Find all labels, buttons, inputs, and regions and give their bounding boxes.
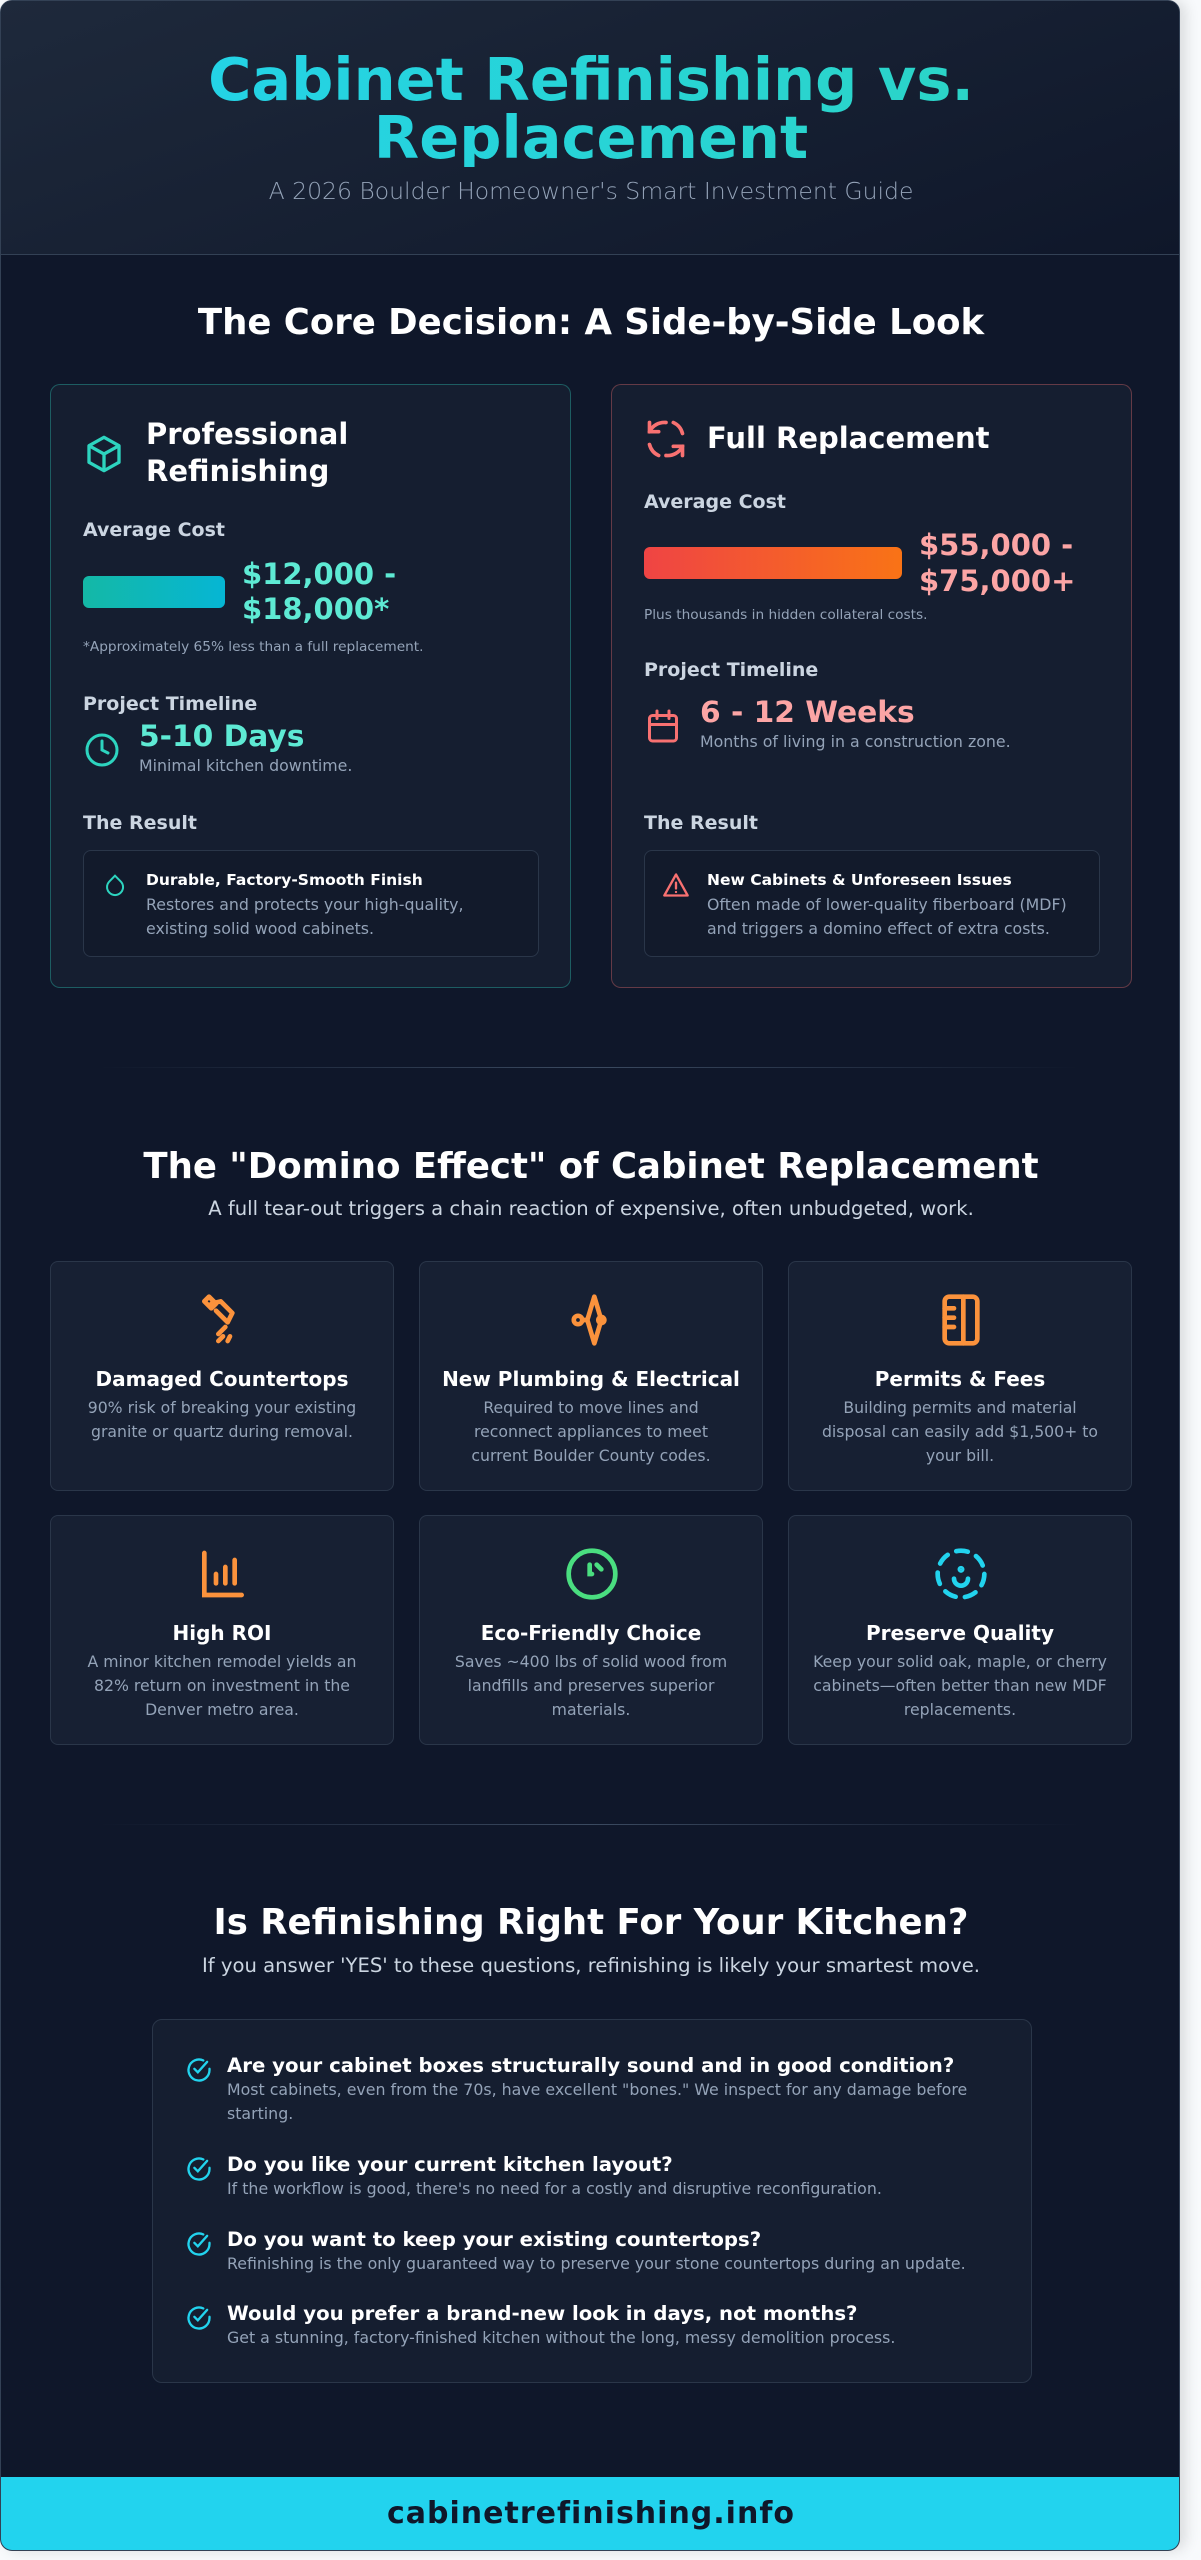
icon: cube <box>87 436 121 472</box>
label: result: The Result <box>83 812 197 834</box>
heading: core decision: The Core Decision: A Side-by-Side Look <box>198 302 984 343</box>
subtitle: checklist: If you answer 'YES' to these questions, refinishing is likely your smartest move. <box>202 1954 980 1977</box>
item 4: Would you prefer a brand-new look in days, not months? <box>227 2302 857 2325</box>
panel: quality: Keep your solid oak, maple, or cherry cabinets—often better than new MDF replacements. <box>813 1652 1107 1719</box>
title <box>1 51 1181 167</box>
heading: domino effect: The "Domino Effect" of Cabinet Replacement <box>143 1146 1039 1187</box>
label: result: The Result <box>644 812 758 834</box>
footnote: *Approximately 65% less than a full replacement. <box>83 639 424 655</box>
label: timeline: Project Timeline <box>83 693 257 715</box>
price: $18,000* <box>242 592 389 626</box>
item 3 <box>187 2228 966 2273</box>
result box: New Cabinets & Unforeseen Issues <box>707 871 1012 889</box>
panel: plumbing: New Plumbing & Electrical <box>442 1367 740 1391</box>
item 4 <box>187 2302 895 2347</box>
result box <box>644 850 1100 957</box>
footnote: Plus thousands in hidden collateral costs. <box>644 607 928 623</box>
icon: warning <box>663 873 689 897</box>
icon: refresh corners <box>648 420 684 458</box>
panel: quality: Preserve Quality <box>866 1621 1054 1645</box>
panel: damaged countertops: 90% risk of breaking your existing granite or quartz during removal. <box>88 1398 356 1441</box>
card title: Full Replacement <box>707 421 990 455</box>
icon: document <box>942 1294 980 1346</box>
icon: plug <box>572 1294 607 1346</box>
price <box>242 557 396 626</box>
price <box>919 528 1075 598</box>
panel: permits <box>788 1261 1132 1491</box>
cost bar <box>83 576 225 608</box>
price: $12,000 - <box>242 557 396 591</box>
timeline subtext: Minimal kitchen downtime. <box>139 756 352 775</box>
item 3: Refinishing is the only guaranteed way to preserve your stone countertops during an update. <box>227 2254 966 2273</box>
label: timeline: Project Timeline <box>644 659 818 681</box>
panel: checklist <box>152 2019 1032 2383</box>
result box: Restores and protects your high-quality, existing solid wood cabinets. <box>146 895 464 938</box>
price: $75,000+ <box>919 564 1075 598</box>
panel: permits: Building permits and material disposal can easily add $1,500+ to your bill. <box>822 1398 1098 1465</box>
panel: permits: Permits & Fees <box>875 1367 1045 1391</box>
panel: professional refinishing <box>50 384 571 988</box>
label: average cost: Average Cost <box>83 519 225 541</box>
icon: calendar <box>648 710 678 742</box>
card title <box>146 417 348 488</box>
panel: roi: A minor kitchen remodel yields an 82% return on investment in the Denver metro area. <box>88 1652 356 1719</box>
panel: damaged countertops <box>50 1261 394 1491</box>
cost bar <box>644 547 902 579</box>
icon: drop <box>106 874 124 896</box>
result box: Durable, Factory-Smooth Finish <box>146 871 423 889</box>
timeline value: 6 - 12 Weeks <box>700 695 915 730</box>
result box <box>83 850 539 957</box>
item 2 <box>187 2153 882 2198</box>
panel: full replacement <box>611 384 1132 988</box>
item 3: Do you want to keep your existing countertops? <box>227 2228 761 2251</box>
result box: Often made of lower-quality fiberboard (MDF) and triggers a domino effect of extra costs. <box>707 895 1067 938</box>
header <box>1 1 1181 255</box>
item 1 <box>187 2054 967 2123</box>
card title: Professional <box>146 417 348 451</box>
panel: eco <box>419 1515 763 1745</box>
card title: Refinishing <box>146 454 329 488</box>
title: Cabinet Refinishing vs. <box>208 45 974 114</box>
item 4: Get a stunning, factory-finished kitchen without the long, messy demolition process. <box>227 2328 895 2347</box>
panel: quality <box>788 1515 1132 1745</box>
item 2: Do you like your current kitchen layout? <box>227 2153 673 2176</box>
icon: bar chart <box>202 1550 244 1598</box>
footer <box>1 2477 1181 2553</box>
item 2: If the workflow is good, there's no need for a costly and disruptive reconfiguration. <box>227 2179 882 2198</box>
panel: eco: Saves ~400 lbs of solid wood from landfills and preserves superior materials. <box>455 1652 727 1719</box>
icon: dashed face <box>935 1548 987 1600</box>
price: $55,000 - <box>919 528 1073 562</box>
timeline value: 5-10 Days <box>139 719 304 754</box>
timeline subtext: Months of living in a construction zone. <box>700 732 1011 751</box>
panel: roi <box>50 1515 394 1745</box>
icon: brush <box>202 1294 235 1344</box>
item 1: Most cabinets, even from the 70s, have excellent "bones." We inspect for any damage before starting. <box>227 2080 967 2123</box>
icon: clock <box>86 734 118 766</box>
panel: damaged countertops: Damaged Countertops <box>96 1367 348 1391</box>
heading: is refinishing right: Is Refinishing Right For Your Kitchen? <box>214 1902 968 1943</box>
subtitle: A 2026 Boulder Homeowner's Smart Investment Guide <box>269 177 913 205</box>
icon: green clock <box>566 1548 618 1600</box>
panel: eco: Eco-Friendly Choice <box>481 1621 701 1645</box>
panel: roi: High ROI <box>173 1621 271 1645</box>
panel: plumbing: Required to move lines and reconnect appliances to meet current Boulder County codes. <box>471 1398 711 1465</box>
footer: cabinetrefinishing.info <box>387 2496 795 2531</box>
subtitle: domino: A full tear-out triggers a chain reaction of expensive, often unbudgeted, work. <box>208 1197 974 1220</box>
item 1: Are your cabinet boxes structurally sound and in good condition? <box>227 2054 954 2077</box>
panel: plumbing <box>419 1261 763 1491</box>
label: average cost: Average Cost <box>644 491 786 513</box>
title: Replacement <box>374 103 808 172</box>
